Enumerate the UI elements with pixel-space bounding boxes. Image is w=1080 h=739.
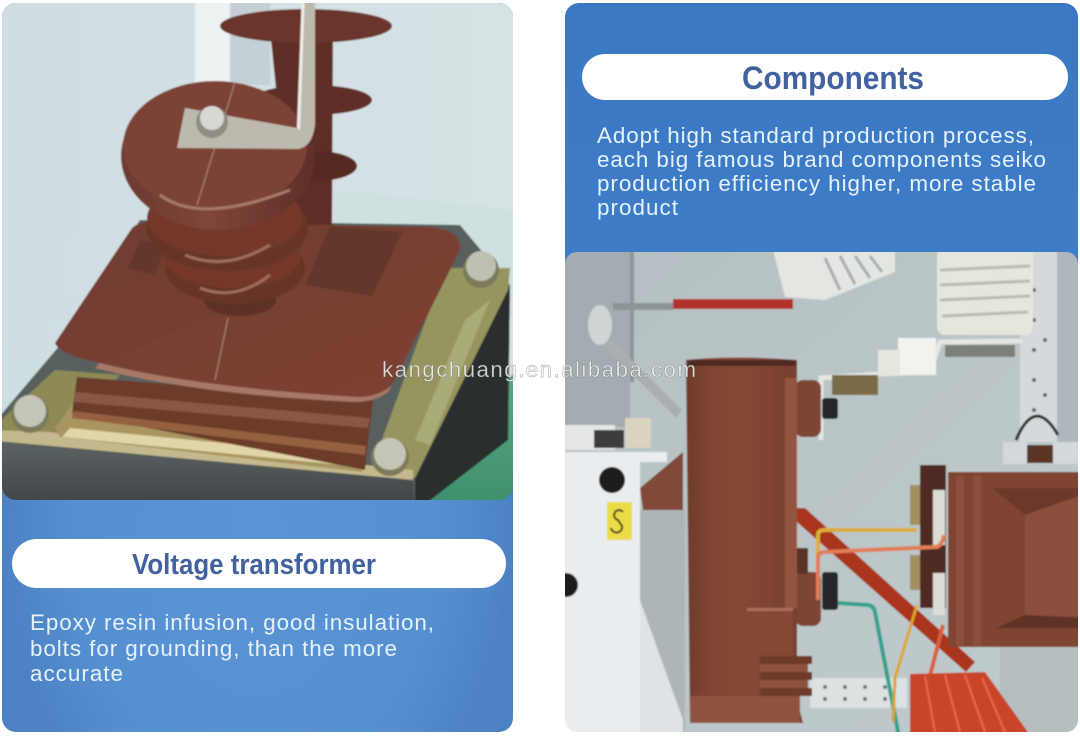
top disc [121, 82, 315, 230]
panel: components [565, 3, 1078, 732]
watermark: kangchuang.en.alibaba.com [382, 357, 696, 382]
white insulators [773, 248, 895, 300]
panel: voltage transformer [0, 0, 528, 732]
label pill: Voltage transformer: Voltage transformer [132, 549, 376, 581]
panel background [565, 3, 1078, 732]
panel background [2, 3, 513, 732]
busbar [821, 338, 1022, 440]
insulator column [270, 30, 333, 225]
small relays and wire loop [1003, 416, 1080, 464]
label pill: Voltage transformer [12, 539, 506, 588]
label pill: Components: Components [742, 60, 924, 96]
red rod [613, 303, 673, 310]
diagonal red bar [797, 508, 975, 672]
yellow tag [607, 502, 632, 540]
left cabinet column [565, 252, 630, 427]
right transformer [910, 465, 1080, 647]
brass frame [0, 370, 120, 432]
iron core [0, 220, 510, 512]
photo: switchgear components [553, 242, 1080, 739]
stacked discs [204, 298, 276, 316]
floor corner [1000, 647, 1078, 732]
wires [818, 530, 944, 739]
photo: voltage transformer [0, 0, 528, 512]
lower perforated tray [810, 678, 907, 708]
description: voltage transformer: bolts for grounding, than the more [30, 636, 397, 661]
white cabinet [565, 451, 668, 732]
nameplates [305, 226, 402, 296]
arm mechanism [553, 305, 682, 450]
heading and text: components [582, 54, 1068, 220]
label pill: Components [582, 54, 1068, 100]
red insulator fins [909, 671, 1029, 732]
description: voltage transformer [30, 614, 432, 681]
bolts [11, 251, 499, 476]
description: voltage transformer: accurate [30, 661, 123, 686]
description: components [597, 123, 1046, 220]
vacuum interrupter [640, 358, 838, 723]
description: components: each big famous brand components seiko [597, 147, 1046, 172]
right rail [1020, 242, 1057, 442]
description: voltage transformer: Epoxy resin infusion, good insulation, [30, 610, 434, 635]
resin body [72, 377, 373, 470]
description: components: production efficiency higher, more stable [597, 171, 1036, 196]
description: components: product [597, 195, 679, 220]
metal bracket [177, 0, 315, 149]
description: components: Adopt high standard production process, [597, 123, 1034, 148]
